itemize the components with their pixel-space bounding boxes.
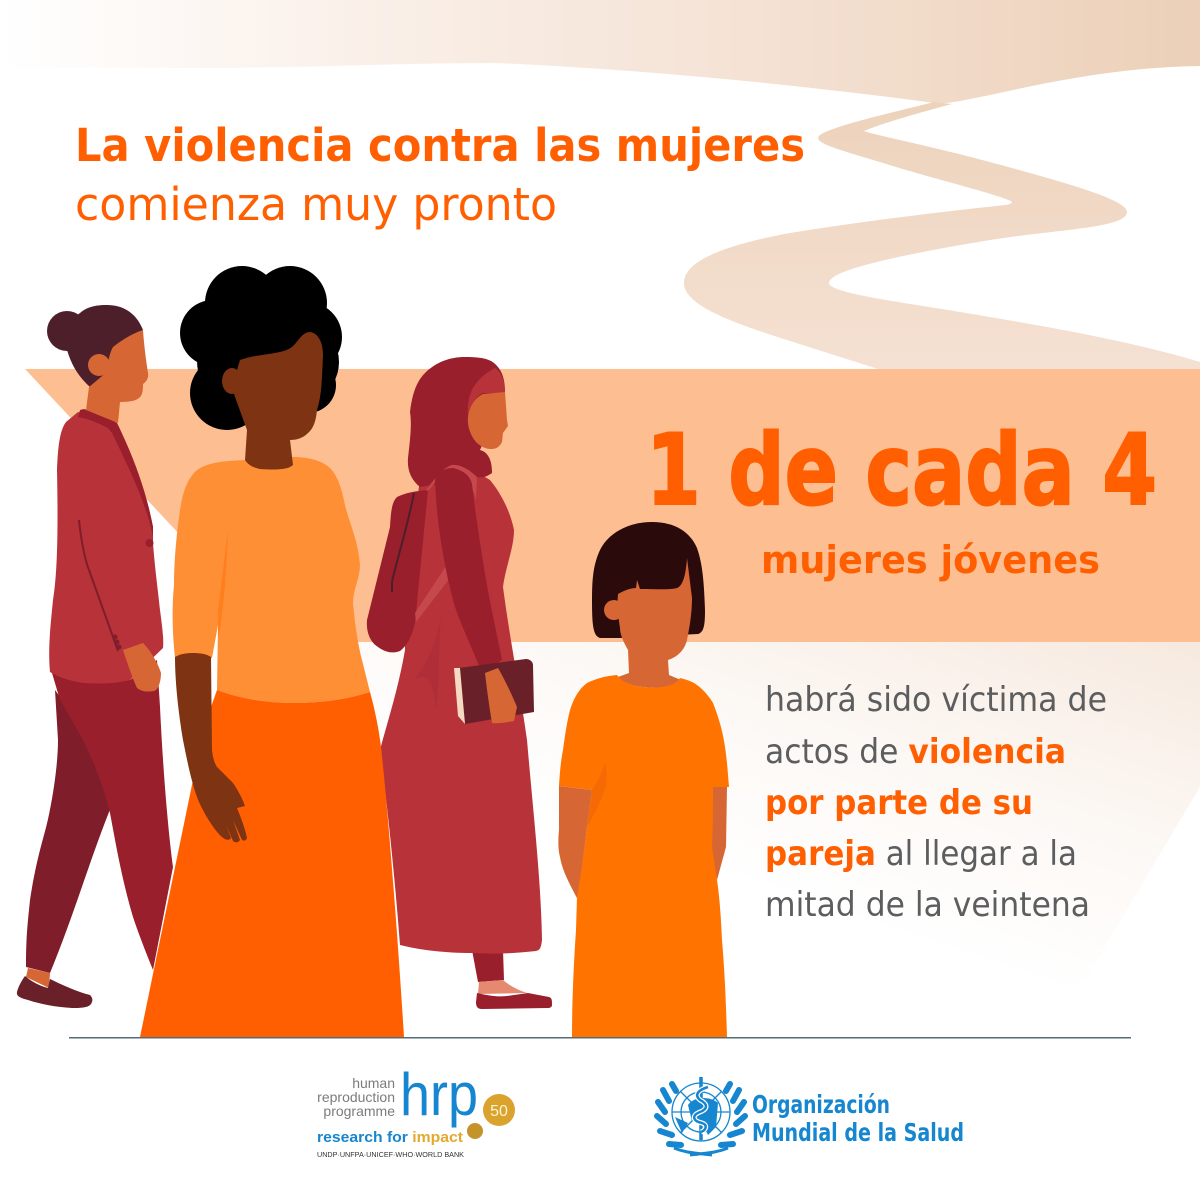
ear [88,354,110,376]
back leg [26,690,120,973]
background: peach banner [25,369,1200,642]
hrp descriptor: reproduction [317,1089,395,1105]
research for impact: research for impact [317,1130,463,1146]
body text [765,680,1107,925]
shoe [17,976,92,1008]
gold 50 badge [483,1094,515,1126]
hrp wordmark: hrp [400,1061,478,1128]
hijab inner fold [468,368,505,418]
laurel wreath [657,1084,745,1145]
serpent body [694,1087,708,1132]
continents [675,1098,718,1135]
book pages [454,668,465,724]
face [468,392,508,449]
logo: Organización Mundial de la Salud [752,1090,964,1147]
hand [123,643,161,692]
dress [559,675,729,1037]
neck and face [86,330,148,423]
line 4: pareja al llegar a la [765,834,1077,874]
hair [592,522,705,638]
globe [672,1083,730,1141]
name line 1: Organización [752,1090,890,1119]
sweater fold [218,530,228,638]
shoulder strap [426,465,477,500]
ear [222,368,242,394]
foot [478,980,527,994]
arm and hand [175,653,247,842]
hrp descriptor [317,1075,395,1119]
hand [485,668,517,723]
dress [380,474,542,954]
skirt [140,690,404,1037]
title line 1: La violencia contra las mujeres [75,119,805,172]
footer rule [69,1037,1131,1038]
figure: woman with bun in burgundy suit [17,305,173,1008]
line 5: mitad de la veintena [765,885,1090,925]
small gold dot [467,1123,483,1139]
ear [604,600,624,620]
sponsors: UNDP·UNFPA·UNICEF·WHO·WORLD BANK [317,1150,464,1159]
face and neck [618,558,692,688]
logo: HRP [317,1061,515,1159]
line 1: habrá sido víctima de [765,680,1107,720]
text: mujeres jóvenes: mujeres jóvenes [761,538,1100,582]
line 3: por parte de su [765,783,1033,823]
right arm [711,787,727,880]
shoe [476,993,552,1009]
leg [472,950,504,982]
sweater [173,457,370,703]
name line 2: Mundial de la Salud [752,1118,964,1147]
jacket [49,412,163,684]
staff [699,1077,703,1140]
hrp descriptor: human [352,1075,395,1091]
lapel [78,409,153,537]
arm [435,468,502,673]
left arm [558,786,592,900]
jacket button [146,539,154,547]
logo: WHO emblem [657,1077,745,1155]
figure: woman with afro in orange [140,266,404,1037]
backpack zipper [392,493,414,592]
background: pale floor below banner [280,642,1200,1037]
badge number: 50 [490,1103,508,1120]
background: top swoosh [0,0,1200,103]
title line 2: comienza muy pronto [75,178,557,231]
figure: girl in orange dress [558,522,729,1037]
hair [47,305,143,387]
dress folds [414,618,441,710]
afro hair [180,266,342,430]
serpent [694,1087,708,1132]
wreath base [674,1148,728,1155]
hijab [408,357,505,487]
lower strap [415,563,450,622]
backpack [367,490,428,652]
neck and face [234,332,323,470]
title [75,119,805,231]
front leg [52,660,173,970]
hrp descriptor: programme [323,1103,395,1119]
book cover [459,659,534,724]
background: winding road [684,102,1200,369]
sleeve seam [79,520,118,651]
figure: woman in hijab with backpack and book [367,357,552,1009]
dress fold [587,762,607,827]
ankle [26,968,50,988]
line 2: actos de violencia [765,732,1066,772]
cuff buttons [115,637,119,647]
